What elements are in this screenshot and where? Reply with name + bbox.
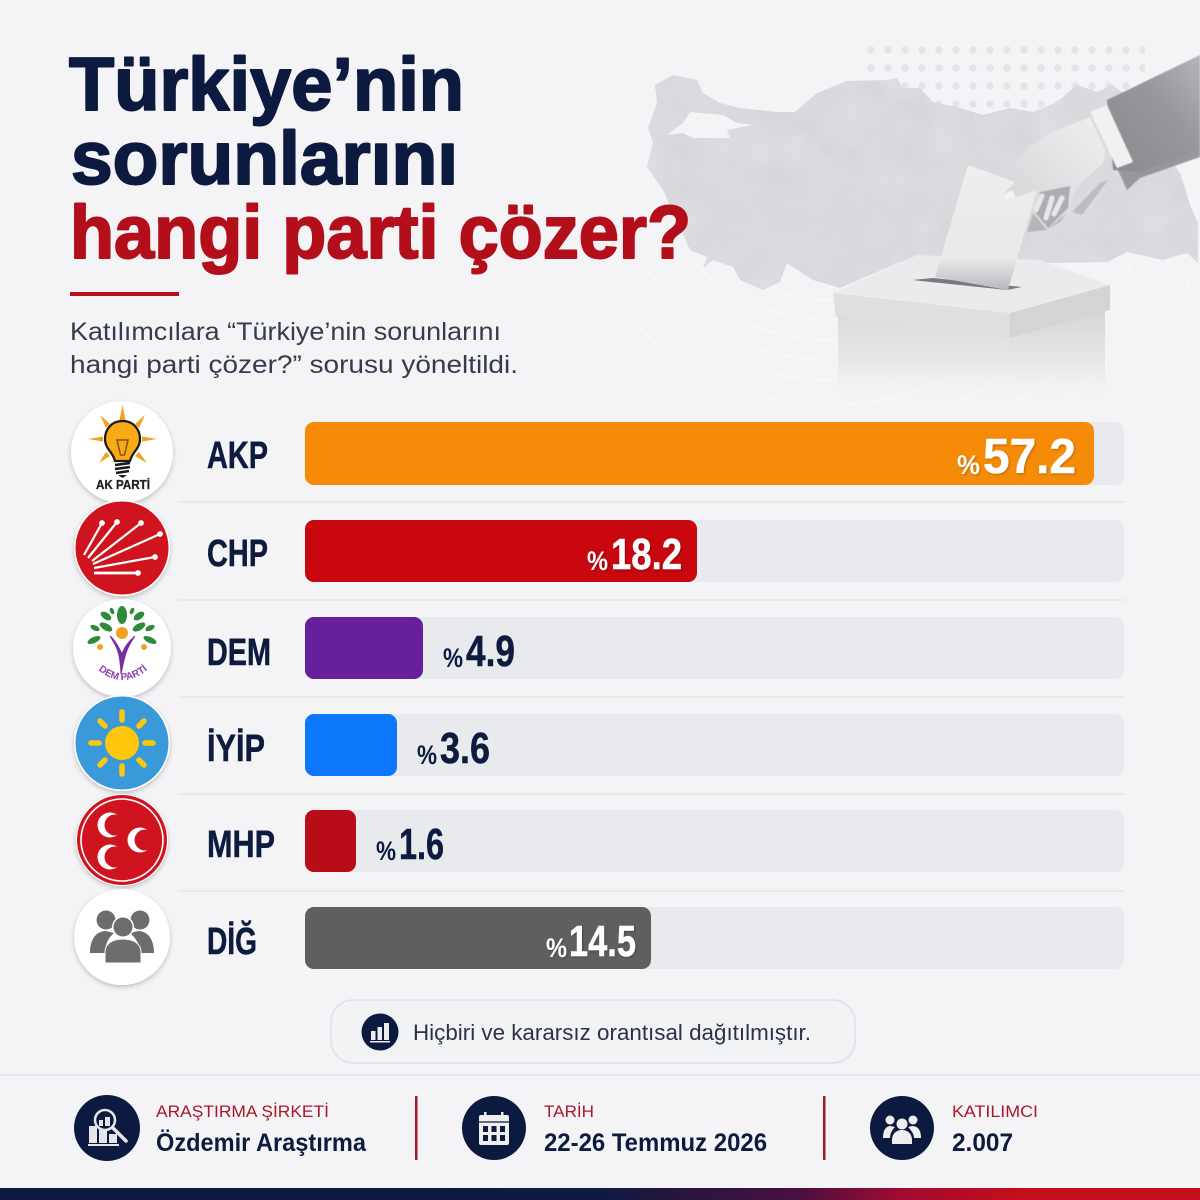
value: 57.2 bbox=[983, 430, 1076, 484]
value bbox=[587, 530, 682, 579]
party label: İYİP bbox=[207, 728, 265, 770]
icon: MHP logo bbox=[76, 794, 168, 886]
value: % bbox=[443, 643, 463, 673]
callout: methodology note bbox=[331, 1000, 855, 1063]
row: AKP bbox=[71, 401, 1124, 503]
icon: magnifier over chart bbox=[74, 1095, 140, 1161]
row: CHP bbox=[74, 500, 1124, 596]
icon: İYİ Parti logo bbox=[74, 695, 170, 791]
party label: CHP bbox=[207, 533, 268, 575]
bottom gradient bar bbox=[0, 1188, 1200, 1200]
title accent rule bbox=[70, 292, 179, 296]
row: Diğer bbox=[74, 889, 1124, 985]
bar track and value bar bbox=[305, 617, 1124, 679]
footer: date: TARİH bbox=[544, 1102, 594, 1121]
row: İYİP bbox=[74, 695, 1124, 791]
footer: date bbox=[462, 1096, 767, 1160]
value: % bbox=[546, 933, 567, 963]
party label: DİĞ bbox=[207, 919, 257, 963]
title: sorunlarını bbox=[71, 116, 458, 200]
icon: DEM Parti logo bbox=[70, 599, 174, 698]
icon: people group bbox=[74, 889, 170, 985]
bar track and value bar bbox=[305, 907, 1124, 969]
party label: AKP bbox=[207, 435, 268, 477]
value: 14.5 bbox=[569, 917, 636, 966]
value: 1.6 bbox=[399, 820, 444, 869]
background illustration: map, dots, ballot box and hand bbox=[440, 0, 1200, 520]
ballot paper bbox=[935, 165, 1037, 290]
icon: AK Parti logo bbox=[71, 401, 173, 503]
title bbox=[69, 42, 691, 274]
value: 3.6 bbox=[440, 724, 490, 773]
callout: methodology note: Hiçbiri ve kararsız orantısal dağıtılmıştır. bbox=[413, 1020, 811, 1045]
value: % bbox=[417, 740, 437, 770]
value bbox=[546, 917, 636, 966]
value: % bbox=[376, 836, 396, 866]
bar track and value bar bbox=[305, 714, 1124, 776]
title: hangi parti çözer? bbox=[70, 190, 691, 274]
icon: CHP logo bbox=[74, 500, 170, 596]
row: MHP bbox=[76, 794, 1124, 886]
footer: date: 22-26 Temmuz 2026 bbox=[544, 1129, 767, 1157]
subtitle bbox=[70, 318, 518, 379]
bar track and value bar bbox=[305, 422, 1124, 485]
footer: research company: ARAŞTIRMA ŞİRKETİ bbox=[156, 1102, 329, 1121]
icon: AK Parti logo: AK PARTİ bbox=[96, 477, 150, 492]
bar track and value bar bbox=[305, 810, 1124, 872]
value bbox=[417, 724, 490, 773]
value bbox=[376, 820, 444, 869]
footer: research company bbox=[74, 1095, 367, 1161]
party label: DEM bbox=[207, 632, 271, 674]
value: 18.2 bbox=[611, 530, 682, 579]
icon: DEM Parti logo: DEM PARTİ bbox=[98, 664, 147, 680]
map of Turkey bbox=[647, 75, 1198, 290]
value: % bbox=[957, 450, 980, 480]
title: Türkiye’nin bbox=[69, 42, 464, 126]
icon: bar chart bbox=[362, 1014, 398, 1050]
party label: MHP bbox=[207, 824, 275, 866]
footer: research company: Özdemir Araştırma bbox=[156, 1128, 367, 1157]
footer: participants: 2.007 bbox=[952, 1129, 1013, 1157]
subtitle: hangi parti çözer?” sorusu yöneltildi. bbox=[70, 351, 518, 379]
subtitle: Katılımcılara “Türkiye’nin sorunlarını bbox=[70, 318, 501, 346]
row: DEM bbox=[70, 599, 1124, 698]
icon: people bbox=[870, 1096, 934, 1160]
value: % bbox=[587, 546, 608, 576]
value: 4.9 bbox=[466, 627, 515, 676]
bar track and value bar bbox=[305, 520, 1124, 582]
footer: participants: KATILIMCI bbox=[952, 1102, 1038, 1121]
footer: participants bbox=[870, 1096, 1038, 1160]
ballot box bbox=[833, 255, 1110, 405]
hand and sleeve bbox=[1003, 55, 1200, 232]
icon: calendar bbox=[462, 1096, 526, 1160]
value bbox=[443, 627, 515, 676]
